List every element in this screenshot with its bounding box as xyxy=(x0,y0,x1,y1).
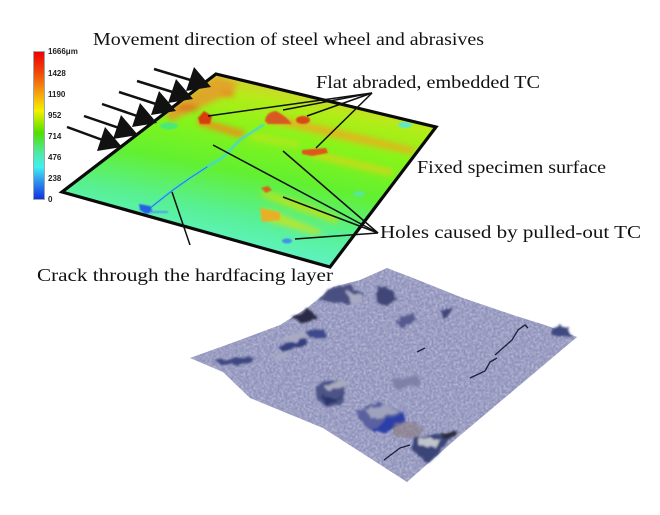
dark surface features xyxy=(212,285,574,462)
crack origin blue marks xyxy=(138,203,169,214)
arrow 1 xyxy=(67,127,122,151)
right edge carbide xyxy=(552,325,574,338)
colour scale legend: 1428 xyxy=(48,69,66,78)
colour scale legend: 476 xyxy=(48,153,62,162)
embedded carbides xyxy=(198,111,412,244)
colour scale legend: 238 xyxy=(48,174,62,183)
arrow 2 xyxy=(84,115,138,139)
panel: coloured height map of specimen surface xyxy=(62,74,436,267)
crack through hardfacing xyxy=(145,125,263,212)
label: holes: Holes caused by pulled-out TC xyxy=(380,222,641,242)
top-left carbide cluster xyxy=(212,285,455,365)
arrow 4 xyxy=(119,91,176,115)
arrow 5 xyxy=(137,79,193,103)
shallow hole xyxy=(160,122,178,130)
colour scale legend: 952 xyxy=(48,111,62,120)
central pit xyxy=(316,380,346,406)
leader lines: holes xyxy=(213,145,378,239)
label: fixed specimen surface: Fixed specimen surface xyxy=(417,157,606,177)
colour scale legend: 1666μm xyxy=(48,47,78,56)
colour scale legend: 714 xyxy=(48,132,62,141)
title: movement direction: Movement direction of steel wheel and abrasives xyxy=(93,29,484,49)
panel: 3D photographic surface xyxy=(190,268,577,482)
arrow 3 xyxy=(102,103,157,127)
wear streaks trailing behind embedded carbides xyxy=(198,114,415,235)
colour scale legend: 1190 xyxy=(48,90,66,99)
arrow 6 xyxy=(154,67,211,91)
light flat facets xyxy=(272,290,420,390)
label: flat abraded: Flat abraded, embedded TC xyxy=(316,72,540,92)
orange band along upper-left edge xyxy=(165,76,240,122)
cracks xyxy=(384,325,528,460)
large blue pit xyxy=(358,403,405,432)
label: crack: Crack through the hardfacing layer xyxy=(37,265,333,285)
lower-right pit xyxy=(412,433,455,462)
colour scale legend: 0 xyxy=(48,195,53,204)
leader line: crack xyxy=(172,192,190,245)
colour scale legend xyxy=(34,47,78,204)
leader lines: flat abraded carbides xyxy=(208,93,372,148)
arrows: movement direction xyxy=(67,67,211,151)
